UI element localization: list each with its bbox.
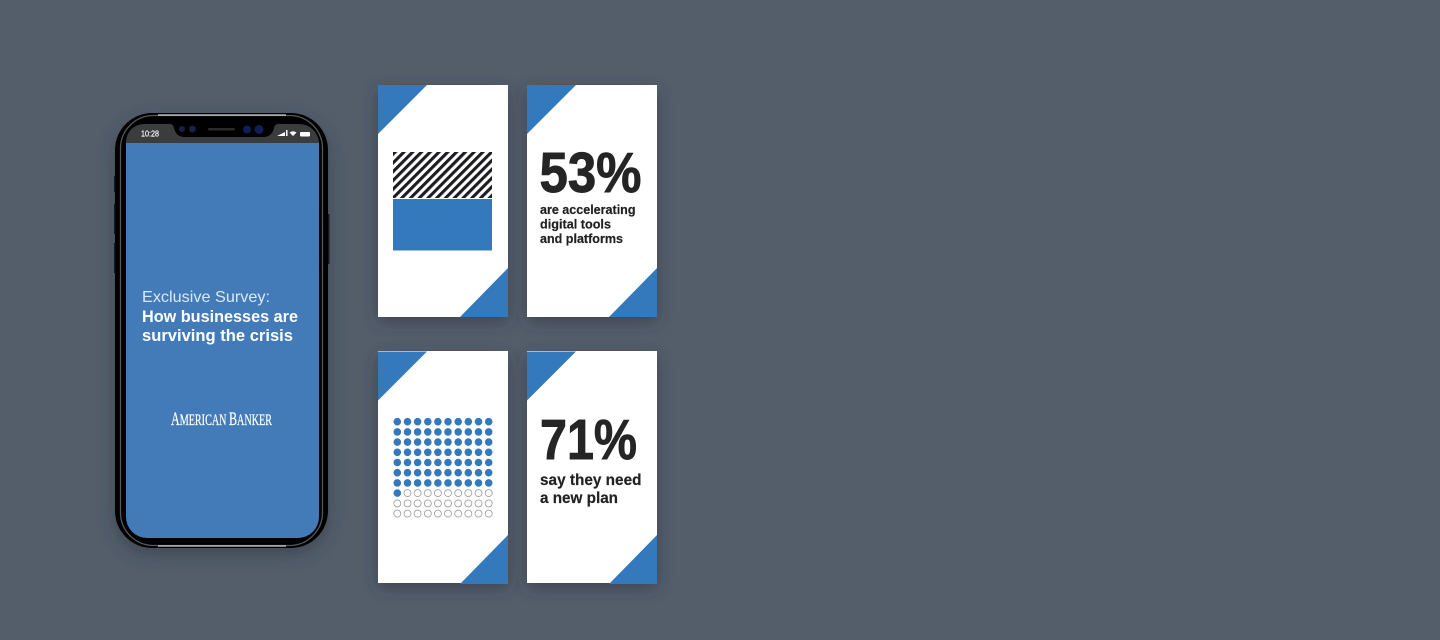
stat: 53% xyxy=(540,141,642,205)
time: 10:28 xyxy=(141,130,159,138)
screen heading xyxy=(142,289,298,345)
screen xyxy=(126,143,319,538)
corner bottom right xyxy=(609,535,657,584)
phone body xyxy=(115,113,328,548)
phone xyxy=(114,113,330,548)
corner top left xyxy=(527,85,576,134)
card: 71% xyxy=(527,351,657,584)
stat: 71% xyxy=(540,408,637,472)
stat caption: a new plan xyxy=(540,490,618,507)
striped block xyxy=(393,152,492,198)
phone bezel ring xyxy=(120,116,322,546)
card: 53% xyxy=(527,85,657,317)
side buttons xyxy=(114,176,330,273)
blue block xyxy=(393,199,492,250)
stat caption: are accelerating xyxy=(540,202,636,217)
corner top left xyxy=(527,352,576,400)
card: dot grid xyxy=(378,351,508,584)
corner bottom right xyxy=(609,268,657,317)
corner top left xyxy=(378,352,427,400)
screen heading: surviving the crisis xyxy=(142,327,293,345)
screen heading: How businesses are xyxy=(142,308,298,326)
card: stripes and block xyxy=(378,85,508,317)
corner bottom right xyxy=(460,535,508,584)
logo: American Banker: AMERICAN BANKER xyxy=(171,409,272,430)
stat caption: and platforms xyxy=(540,231,623,246)
status icons xyxy=(277,130,310,136)
status bar xyxy=(126,124,319,143)
dot chart 71 of 100 xyxy=(394,418,493,517)
stat caption: say they need xyxy=(540,472,642,489)
stat caption: digital tools xyxy=(540,216,611,232)
corner bottom right xyxy=(460,268,508,317)
stat caption xyxy=(540,202,636,246)
notch sensors xyxy=(179,125,264,134)
phone rim highlights xyxy=(158,115,286,546)
stat caption xyxy=(540,472,642,507)
screen heading: Exclusive Survey: xyxy=(142,289,270,306)
corner top left xyxy=(378,85,427,134)
